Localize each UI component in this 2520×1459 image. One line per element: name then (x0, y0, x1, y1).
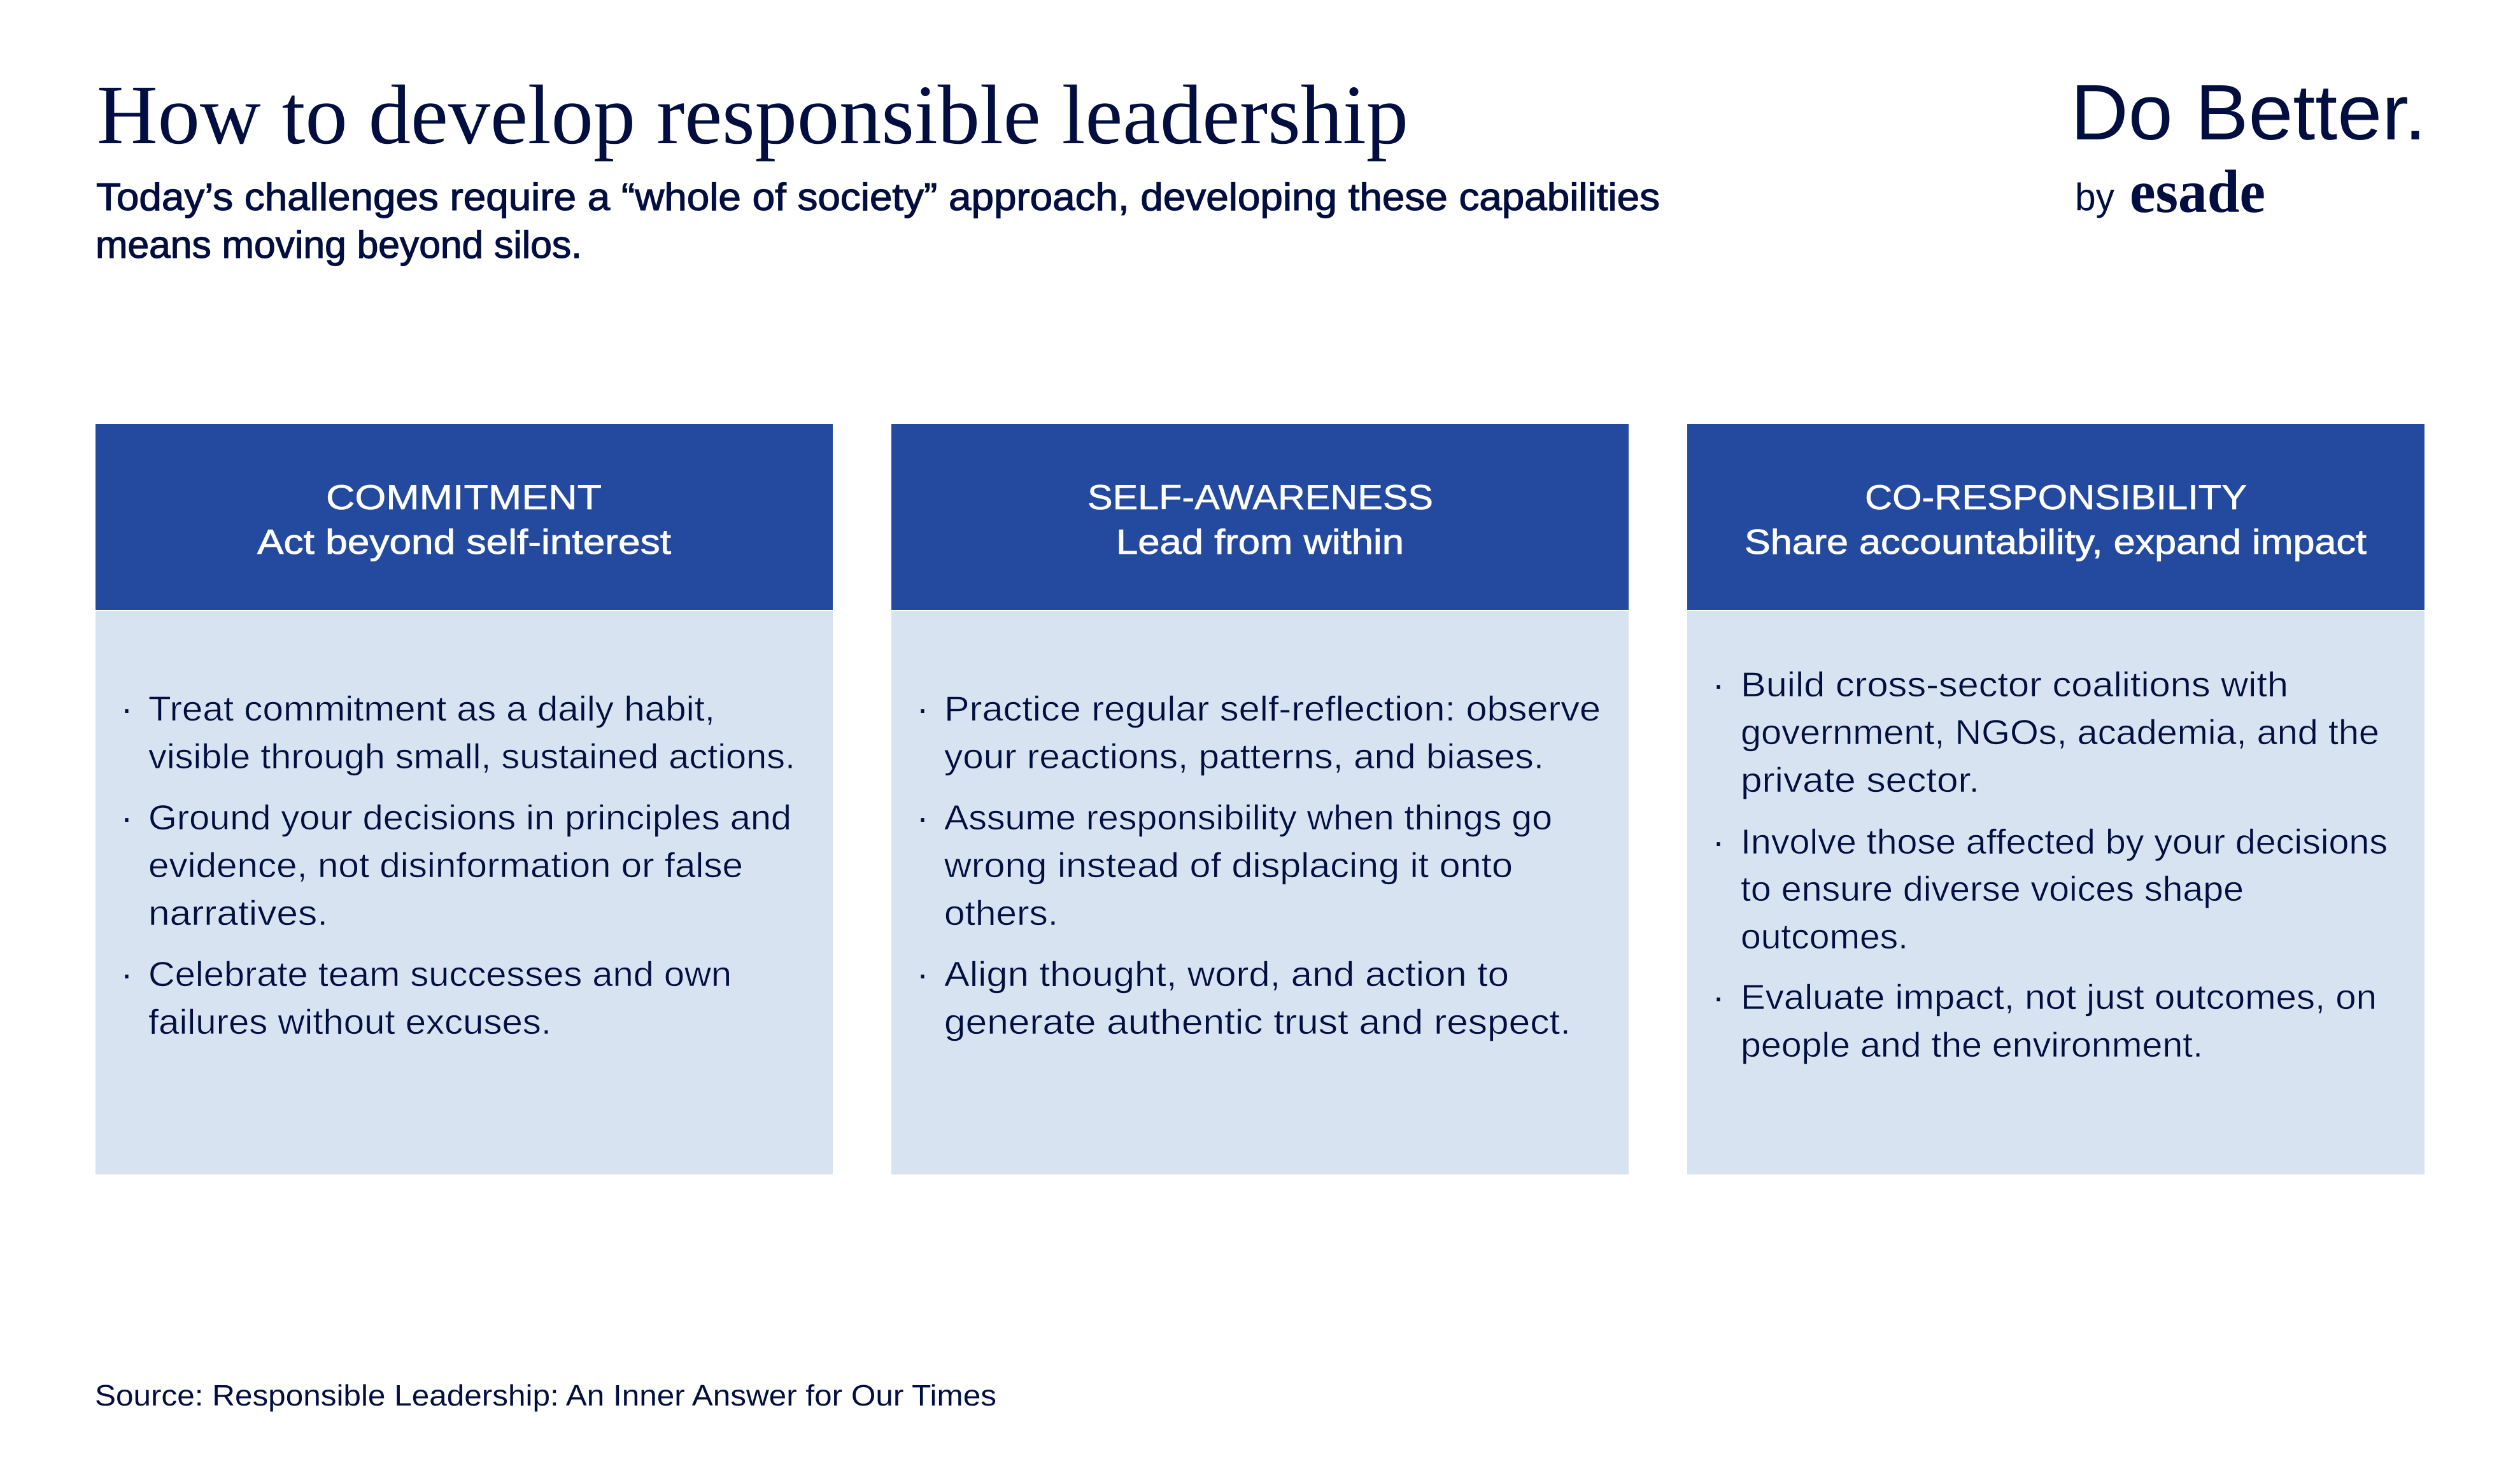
panel header: commitment (96, 424, 833, 610)
panel body: self-awareness bullet list: others. (944, 893, 1058, 933)
panel body: commitment bullet list: visible through small, sustained actions. (148, 737, 795, 776)
panel body: co-responsibility bullet list: to ensure diverse voices shape (1741, 869, 2244, 908)
panel body: commitment bullet list: evidence, not disinformation or false (148, 845, 743, 885)
panel body: commitment bullet list (96, 611, 833, 1174)
panel header: commitment: COMMITMENT (326, 477, 602, 517)
panel body: commitment bullet list: narratives. (148, 893, 328, 933)
panel body: co-responsibility bullet list: · (1713, 977, 1724, 1017)
subtitle: Today’s challenges require a “whole of society” approach, developing these capabilities (96, 176, 1660, 218)
panel header: self-awareness: Lead from within (1116, 522, 1404, 561)
panel body: co-responsibility bullet list: private sector. (1741, 760, 1979, 800)
panel body: co-responsibility bullet list: people and the environment. (1741, 1025, 2203, 1064)
panel body: self-awareness bullet list: Align thought, word, and action to (944, 954, 1509, 994)
logo: Do Better by esade (2071, 69, 2426, 225)
panel body: co-responsibility bullet list: outcomes. (1741, 917, 1908, 956)
panel body: commitment bullet list: failures without excuses. (148, 1002, 551, 1041)
panel body: co-responsibility bullet list (1687, 611, 2424, 1174)
panel body: self-awareness bullet list: generate authentic trust and respect. (944, 1002, 1571, 1041)
panel header: self-awareness (891, 424, 1629, 610)
source note: Source: Responsible Leadership: An Inner Answer for Our Times (95, 1379, 996, 1412)
panel body: co-responsibility bullet list: · (1713, 665, 1724, 704)
panel body: co-responsibility bullet list: Involve those affected by your decisions (1741, 822, 2388, 861)
panel: co-responsibility (1687, 424, 2424, 1174)
panel body: self-awareness bullet list: wrong instead of displacing it onto (944, 845, 1513, 885)
panel body: co-responsibility bullet list: · (1713, 822, 1724, 861)
logo: Do Better by esade: esade (2130, 158, 2265, 225)
panel header: commitment: Act beyond self-interest (257, 522, 671, 561)
panel body: co-responsibility bullet list: Build cross-sector coalitions with (1741, 665, 2288, 704)
panel header: co-responsibility: Share accountability, expand impact (1745, 522, 2367, 561)
panel body: commitment bullet list: Treat commitment as a daily habit, (148, 689, 715, 728)
title: How to develop responsible leadership (97, 67, 1408, 162)
panel body: self-awareness bullet list: · (917, 689, 928, 728)
subtitle: means moving beyond silos. (96, 223, 582, 266)
logo: Do Better by esade: by (2075, 176, 2114, 218)
panel body: commitment bullet list: Celebrate team successes and own (148, 954, 732, 994)
panel: self-awareness (891, 424, 1629, 1174)
panel header: co-responsibility (1687, 424, 2424, 610)
panel body: self-awareness bullet list: Practice regular self-reflection: observe (944, 689, 1601, 728)
panel body: commitment bullet list: · (121, 954, 132, 994)
panel: commitment (96, 424, 833, 1174)
panel body: self-awareness bullet list: · (917, 954, 928, 994)
subtitle (96, 176, 1660, 266)
panel body: co-responsibility bullet list: Evaluate impact, not just outcomes, on (1741, 977, 2377, 1017)
panel header: self-awareness: SELF-AWARENESS (1087, 477, 1433, 517)
panel body: co-responsibility bullet list: government, NGOs, academia, and the (1741, 712, 2379, 752)
panel body: self-awareness bullet list: · (917, 798, 928, 837)
panel body: commitment bullet list: · (121, 689, 132, 728)
panel body: self-awareness bullet list: Assume responsibility when things go (944, 798, 1552, 837)
panel body: commitment bullet list: Ground your decisions in principles and (148, 798, 791, 837)
panel body: self-awareness bullet list: your reactions, patterns, and biases. (944, 737, 1544, 776)
panel body: self-awareness bullet list (891, 611, 1629, 1174)
panel body: commitment bullet list: · (121, 798, 132, 837)
logo: Do Better by esade: Do Better. (2071, 69, 2426, 157)
panel header: co-responsibility: CO-RESPONSIBILITY (1865, 477, 2247, 517)
